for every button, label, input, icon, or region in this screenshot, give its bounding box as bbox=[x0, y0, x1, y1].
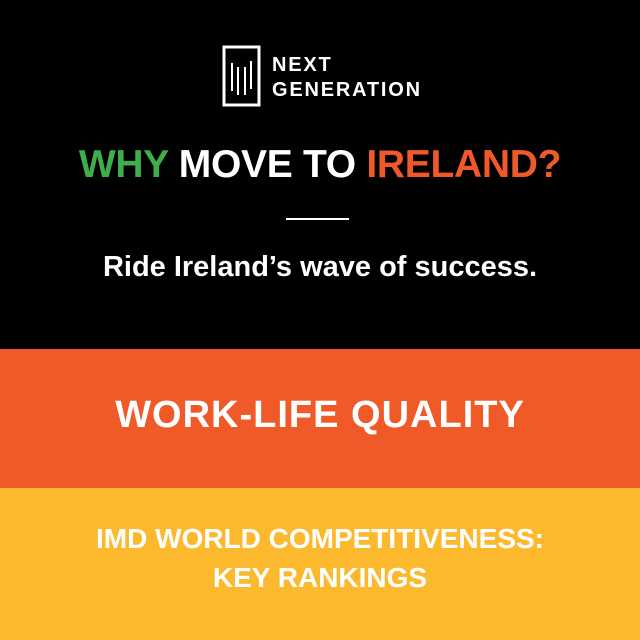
icon: logo frame bbox=[222, 46, 260, 106]
heading: IMD rankings: IMD WORLD COMPETITIVENESS: bbox=[96, 523, 544, 554]
logo text: NEXT bbox=[272, 54, 333, 76]
panel: IMD rankings bbox=[0, 488, 640, 640]
panel: header bbox=[0, 0, 640, 349]
subtitle: Ride Ireland’s wave of success. bbox=[103, 251, 537, 283]
heading: work-life quality: WORK-LIFE QUALITY bbox=[115, 394, 525, 436]
logo text bbox=[272, 54, 422, 101]
logo bbox=[222, 46, 422, 106]
panel: work-life quality bbox=[0, 349, 640, 488]
heading: IMD rankings: KEY RANKINGS bbox=[213, 562, 427, 593]
title: WHY MOVE TO IRELAND? bbox=[79, 143, 561, 186]
heading: IMD rankings bbox=[96, 523, 544, 593]
logo text: GENERATION bbox=[272, 79, 422, 101]
